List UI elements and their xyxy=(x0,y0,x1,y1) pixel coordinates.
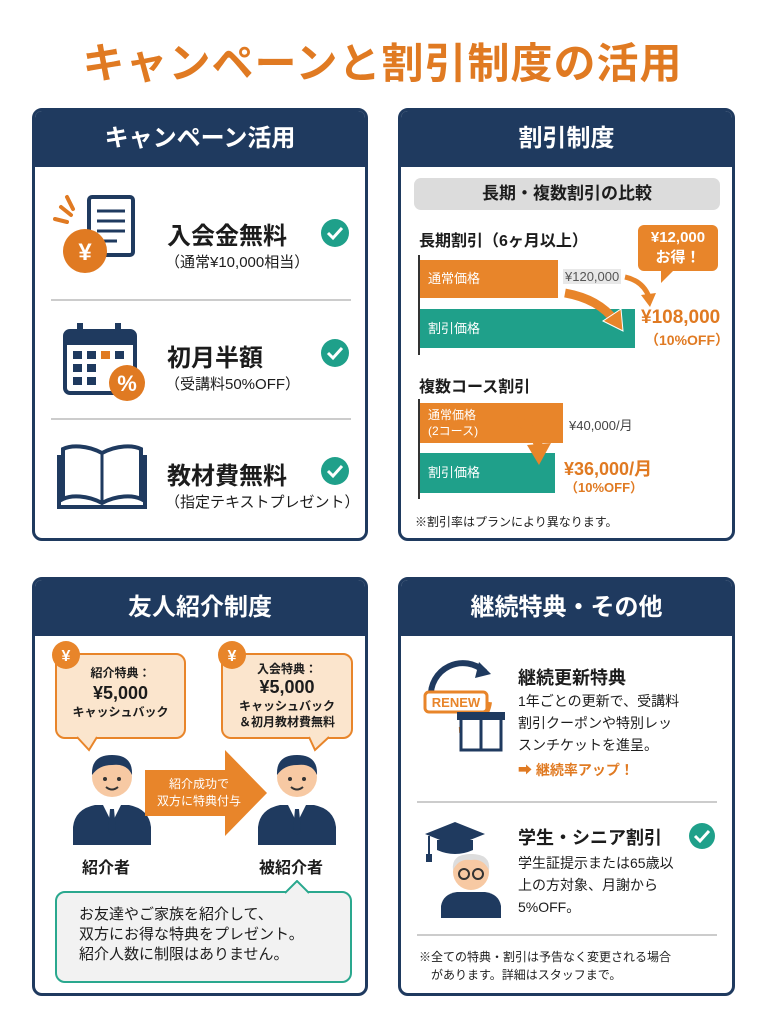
panel: continuation: ➡ 継続率アップ！ xyxy=(518,762,634,778)
bubble: referred: 入会特典： xyxy=(257,662,317,676)
chart: multi-course: （10%OFF） xyxy=(565,480,643,495)
text: renewal: 継続更新特典 xyxy=(518,668,626,688)
heading: referral: 友人紹介制度 xyxy=(128,594,272,621)
callout: 12000: ¥12,000 xyxy=(651,229,705,246)
bubble: referrer: キャッシュバック xyxy=(72,705,168,719)
chart: multi-course: ¥36,000/月 xyxy=(564,459,652,479)
chart: long-term xyxy=(418,225,729,355)
panel: continuation: 5%OFF。 xyxy=(518,899,580,915)
item: entry fee free: （通常¥10,000相当） xyxy=(165,254,309,271)
panel: referral: ¥ xyxy=(228,648,237,665)
bubble: referrer xyxy=(55,653,186,739)
chart: long-term: ¥120,000 xyxy=(565,269,619,284)
chart: long-term: 通常価格 xyxy=(428,271,480,286)
subheading bar: 長期・複数割引の比較 xyxy=(482,184,652,203)
icon: graduate senior xyxy=(425,822,501,918)
icon: document yen: ¥ xyxy=(78,239,92,266)
item: first month half: （受講料50%OFF） xyxy=(165,376,300,393)
chart: multi-course: 複数コース割引 xyxy=(419,379,530,396)
text: 入会金無料 xyxy=(167,223,287,250)
callout: description: お友達やご家族を紹介して、 xyxy=(79,906,273,923)
bubble: referred: ＆初月教材費無料 xyxy=(239,715,335,729)
icon: renew gift xyxy=(424,660,505,752)
panel: continuation: 割引クーポンや特別レッ xyxy=(518,715,672,731)
label: referrer: 紹介者 xyxy=(82,860,130,877)
title: キャンペーンと割引制度の活用 xyxy=(83,40,682,87)
panel: referral xyxy=(32,577,368,996)
text: student senior: 学生・シニア割引 xyxy=(518,828,662,848)
callout: description: 紹介人数に制限はありません。 xyxy=(79,946,289,963)
label: referred: 被紹介者 xyxy=(259,860,323,877)
callout: description xyxy=(55,891,352,983)
chart: multi-course: ¥40,000/月 xyxy=(569,418,633,433)
note: ※全ての特典・割引は予告なく変更される場合 xyxy=(419,950,671,964)
panel: campaign xyxy=(32,108,368,541)
bubble: referred: キャッシュバック xyxy=(239,699,335,713)
bubble: referred xyxy=(221,653,353,739)
heading: referral xyxy=(35,580,365,636)
chart: long-term: 割引価格 xyxy=(428,321,480,336)
icon: renew gift: RENEW xyxy=(432,695,481,710)
callout: 12000: お得！ xyxy=(655,249,700,266)
note: ※割引率はプランにより異なります。 xyxy=(415,515,618,529)
item: first month half xyxy=(63,323,349,401)
item: first month half: 初月半額 xyxy=(167,345,263,372)
icon: person referred xyxy=(258,755,336,845)
chart: multi-course: 割引価格 xyxy=(428,465,480,480)
chart: multi-course xyxy=(418,378,652,499)
callout: 12000 xyxy=(638,225,718,271)
arrow: referral success xyxy=(145,750,267,836)
chart: multi-course: (2コース) xyxy=(428,424,478,438)
icon: document yen xyxy=(53,194,135,273)
chart: multi-course: 通常価格 xyxy=(428,408,476,422)
heading: discounts: 割引制度 xyxy=(518,125,614,152)
icon: calendar: % xyxy=(117,371,137,396)
callout: description: 双方にお得な特典をプレゼント。 xyxy=(79,926,304,943)
heading: campaign xyxy=(35,111,365,167)
panel: continuation xyxy=(398,577,735,996)
panel: continuation: 1年ごとの更新で、受講料 xyxy=(518,693,679,709)
panel: continuation: 上の方対象、月謝から xyxy=(518,877,658,893)
arrow: referral success: 双方に特典付与 xyxy=(157,794,241,808)
panel: discounts xyxy=(398,108,735,541)
icon: person referrer xyxy=(73,755,151,845)
heading xyxy=(401,580,732,636)
icon: check xyxy=(321,219,349,247)
item: textbook free: 教材費無料 xyxy=(167,463,287,490)
note: があります。詳細はスタッフまで。 xyxy=(431,968,621,982)
item: textbook free xyxy=(57,444,360,511)
note xyxy=(419,950,671,982)
bubble: referrer: 紹介特典： xyxy=(90,666,150,680)
item: textbook free: （指定テキストプレゼント） xyxy=(165,494,360,511)
chart: long-term: （10%OFF） xyxy=(645,332,729,348)
arrows xyxy=(564,271,673,332)
icon: calendar xyxy=(63,323,145,401)
subheading bar xyxy=(414,178,720,210)
heading: campaign: キャンペーン活用 xyxy=(105,125,295,152)
item: entry fee free xyxy=(53,194,349,273)
panel: continuation: 学生証提示または65歳以 xyxy=(518,855,674,871)
panel: referral: ¥ xyxy=(62,648,71,665)
chart: long-term: ¥108,000 xyxy=(641,307,720,328)
panel: continuation: スンチケットを進呈。 xyxy=(518,737,658,753)
chart: long-term: 長期割引（6ヶ月以上） xyxy=(419,233,588,250)
arrow: referral success: 紹介成功で xyxy=(169,777,229,791)
bubble: referrer: ¥5,000 xyxy=(93,683,148,703)
heading: discounts xyxy=(401,111,732,167)
heading: 継続特典・その他 xyxy=(470,594,662,621)
icon: book xyxy=(57,444,147,509)
bubble: referred: ¥5,000 xyxy=(259,677,315,697)
